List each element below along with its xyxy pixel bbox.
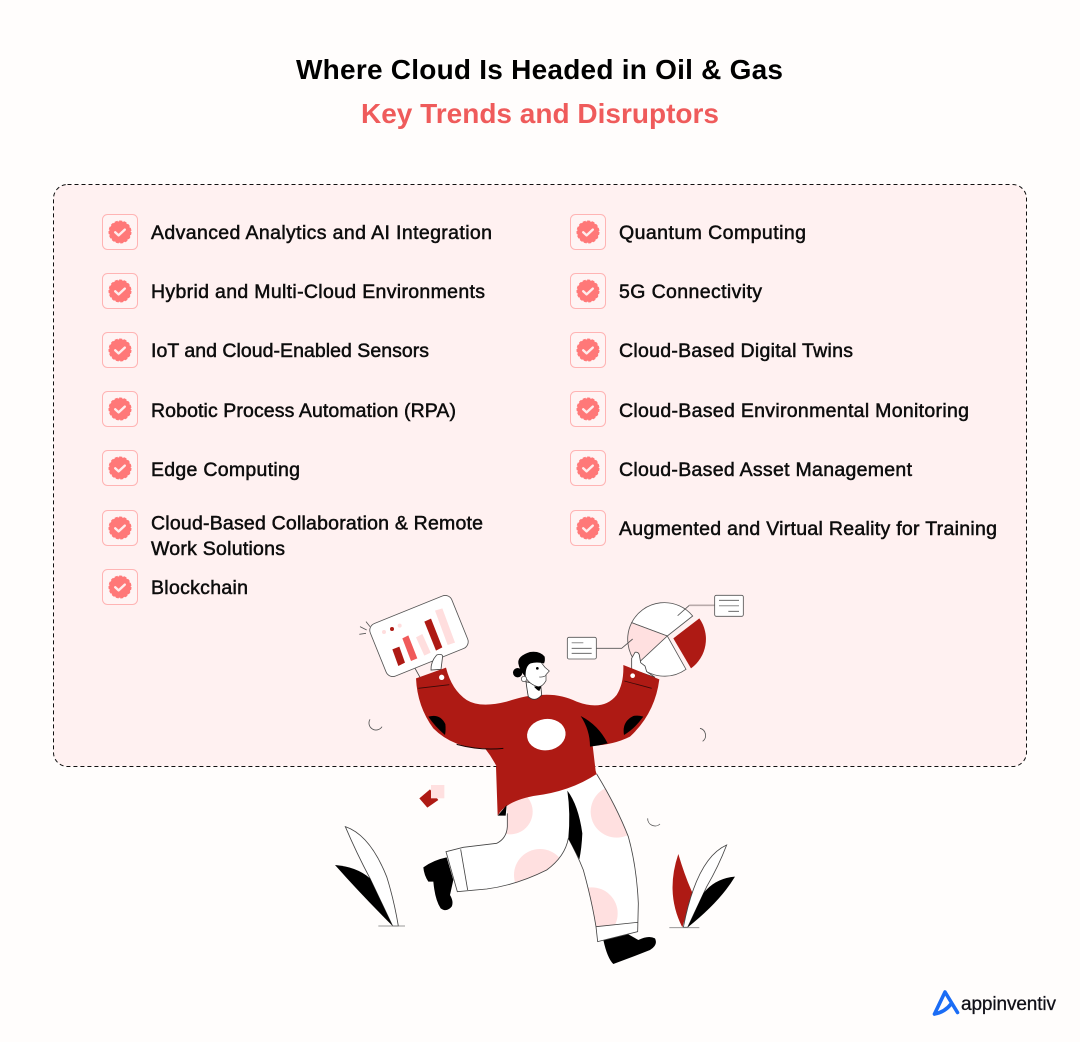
list item: Augmented and Virtual Reality for Training	[570, 510, 997, 546]
list item: Cloud-Based Collaboration and Remote Work Solutions	[102, 510, 483, 560]
pie chart with callouts	[567, 595, 743, 676]
list item: 5G Connectivity	[570, 274, 762, 308]
illustration: lower body, plants and shapes	[335, 767, 735, 964]
list item: Advanced Analytics and AI Integration	[102, 214, 492, 250]
right trouser leg	[566, 774, 643, 942]
list item: Robotic Process Automation	[102, 392, 456, 426]
list item: Cloud-Based Collaboration and Remote Work Solutions: Cloud-Based Collaboration & Remote	[151, 512, 483, 534]
left trouser leg	[446, 798, 568, 892]
icon: right plant	[669, 845, 735, 928]
list item: Cloud-Based Environmental Monitoring: Cloud-Based Environmental Monitoring	[619, 400, 969, 422]
list item: Cloud-Based Environmental Monitoring	[570, 392, 969, 426]
list item: Robotic Process Automation: Robotic Process Automation (RPA)	[151, 400, 456, 422]
list item: Cloud-Based Asset Management	[570, 450, 913, 486]
list item: Hybrid and Multi-Cloud Environments	[102, 274, 485, 308]
sweater hem	[496, 767, 597, 816]
sweater	[416, 665, 659, 774]
list item: Edge Computing	[102, 450, 300, 486]
list item: Blockchain: Blockchain	[151, 577, 248, 599]
list item: Advanced Analytics and AI Integration: Advanced Analytics and AI Integration	[151, 222, 492, 244]
list item: Cloud-Based Digital Twins: Cloud-Based Digital Twins	[619, 340, 853, 362]
list item: IoT and Cloud-Enabled Sensors	[102, 332, 429, 368]
hem shadow	[498, 805, 507, 816]
list item: Hybrid and Multi-Cloud Environments: Hybrid and Multi-Cloud Environments	[151, 281, 485, 303]
tablet with bar chart	[359, 593, 470, 679]
right shoe	[603, 933, 656, 964]
list item: Augmented and Virtual Reality for Training: Augmented and Virtual Reality for Training	[619, 518, 997, 540]
list item: Quantum Computing	[570, 214, 806, 250]
icon: small arc	[648, 818, 660, 826]
icon: arc left	[369, 719, 382, 730]
panel: trends list background	[54, 184, 1026, 766]
list item: Edge Computing: Edge Computing	[151, 459, 300, 481]
icon: left plant	[335, 827, 405, 926]
sweater details	[418, 673, 652, 753]
list item: IoT and Cloud-Enabled Sensors: IoT and Cloud-Enabled Sensors	[151, 340, 429, 362]
icon: arc right	[700, 728, 706, 741]
illustration: upper body with tablet and pie chart	[359, 593, 743, 774]
left shoe	[423, 857, 453, 910]
subtitle: Key Trends and Disruptors	[361, 98, 719, 129]
list item: Quantum Computing: Quantum Computing	[619, 222, 806, 244]
title: Where Cloud Is Headed in Oil & Gas	[296, 54, 783, 85]
list item: Cloud-Based Asset Management: Cloud-Based Asset Management	[619, 459, 913, 481]
list item: Cloud-Based Digital Twins	[570, 332, 853, 368]
list item: Blockchain	[102, 570, 248, 604]
logo: appinventiv: appinventiv	[961, 994, 1056, 1015]
head and neck	[513, 652, 549, 699]
list item: Cloud-Based Collaboration and Remote Work Solutions: Work Solutions	[151, 538, 285, 560]
right hand	[632, 652, 655, 677]
icon: floating squares	[419, 785, 444, 808]
list item: 5G Connectivity: 5G Connectivity	[619, 281, 762, 303]
